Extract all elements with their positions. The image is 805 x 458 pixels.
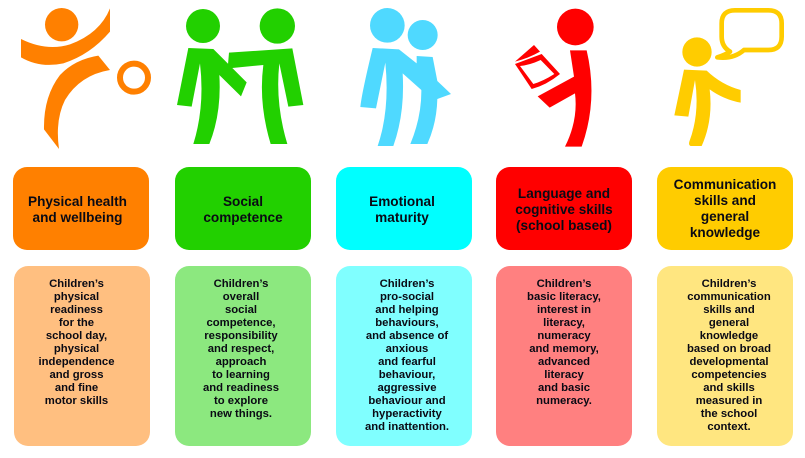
text panel: communication: knowledge [700, 330, 758, 342]
text panel: communication: context. [707, 421, 751, 433]
text panel: language: literacy [544, 369, 584, 381]
heading: social competence: competence [203, 210, 283, 224]
text panel: language [496, 266, 632, 446]
text panel: social: overall [223, 291, 259, 303]
text panel: physical: school day, [46, 330, 107, 342]
heading: physical health: Physical health [28, 194, 127, 208]
text panel: communication: developmental [689, 356, 769, 368]
heading: emotional maturity: maturity [375, 210, 429, 224]
text panel: social: Children’s [214, 278, 268, 290]
text panel: physical: readiness [50, 304, 103, 316]
text panel: language: literacy, [543, 317, 585, 329]
heading: language and cognitive [496, 167, 632, 250]
text panel: emotional: anxious [386, 343, 428, 355]
text panel: social: responsibility [204, 330, 278, 342]
text panel: social: approach [216, 356, 266, 368]
heading: communication: skills and [694, 192, 756, 208]
text panel: emotional: pro-social [380, 291, 434, 303]
text panel: communication: measured in [696, 395, 762, 407]
heading: communication: knowledge [690, 224, 760, 240]
text panel: language: and memory, [529, 343, 599, 355]
heading: physical health [13, 167, 149, 250]
text panel: social [175, 266, 311, 446]
text panel: physical: and fine [55, 382, 98, 394]
heading: emotional maturity: Emotional [369, 194, 435, 208]
text panel: emotional: behaviour, [379, 369, 435, 381]
text panel: social: to explore [214, 395, 268, 407]
text panel: communication [657, 266, 793, 446]
heading: language and cognitive: Language and [518, 186, 610, 200]
text panel: emotional [336, 266, 472, 446]
text panel: physical: Children’s [49, 278, 104, 290]
text panel: emotional: aggressive [377, 382, 437, 394]
text panel: social: and respect, [208, 343, 274, 355]
text panel: emotional: behaviour and [368, 395, 446, 407]
icon: embracing figures [360, 8, 451, 146]
text panel: physical: for the [59, 317, 94, 329]
icon: two friends [177, 8, 303, 144]
icon: child reading book [515, 9, 594, 147]
text panel: social: competence, [206, 317, 276, 329]
text panel: physical: physical [54, 291, 99, 303]
text panel: emotional: hyperactivity [372, 408, 442, 420]
heading: social competence [175, 167, 311, 250]
text panel: language: Children’s [537, 278, 591, 290]
text panel: communication: based on broad [687, 343, 771, 355]
text panel: physical: motor skills [45, 395, 108, 407]
text panel: language: numeracy. [536, 395, 592, 407]
heading: communication: Communication [674, 176, 776, 192]
text panel: communication: communication [687, 291, 771, 303]
text panel: communication: general [709, 317, 749, 329]
heading: communication: general [701, 208, 749, 224]
heading: language and cognitive: (school based) [516, 218, 612, 232]
text panel: physical: and gross [50, 369, 104, 381]
text panel: emotional: and absence of [366, 330, 448, 342]
text panel: communication: the school [701, 408, 757, 420]
text panel: language: basic literacy, [527, 291, 601, 303]
text panel: emotional: and fearful [378, 356, 436, 368]
text panel: language: numeracy [537, 330, 591, 342]
icons row [21, 8, 784, 149]
text panel: emotional: and inattention. [365, 421, 449, 433]
text panel: communication: competencies [691, 369, 767, 381]
text panel: communication: and skills [703, 382, 755, 394]
text panel: communication: Children’s [702, 278, 756, 290]
text panel: communication: skills and [703, 304, 755, 316]
text panel: language: and basic [538, 382, 590, 394]
text panel: social: new things. [210, 408, 272, 420]
heading: physical health: and wellbeing [33, 210, 122, 224]
heading: social competence: Social [223, 194, 263, 208]
text panel: emotional: Children’s [380, 278, 434, 290]
heading: communication [657, 167, 793, 250]
text panel: physical: independence [39, 356, 114, 368]
text panel: social: and readiness [203, 382, 279, 394]
text panel: emotional: and helping [375, 304, 439, 316]
text panel: physical [14, 266, 150, 446]
icon: child kicking ball [21, 8, 148, 149]
text panel: emotional: behaviours, [375, 317, 439, 329]
text panel: physical: physical [54, 343, 99, 355]
text panel: language: advanced [538, 356, 590, 368]
heading: emotional maturity [336, 167, 472, 250]
heading: language and cognitive: cognitive skills [515, 202, 613, 216]
text panel: language: interest in [537, 304, 591, 316]
text panel: social: social [225, 304, 257, 316]
text panel: social: to learning [212, 369, 270, 381]
icon: child with speech bubble [674, 10, 782, 146]
